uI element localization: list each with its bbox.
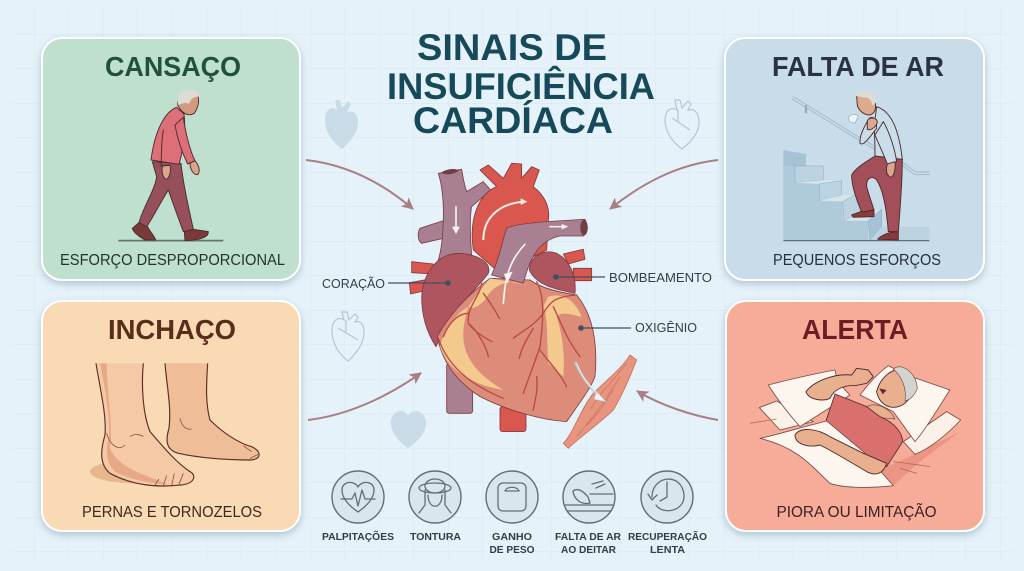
illustration: man in bed with pillows <box>750 366 961 487</box>
icon: ganho de peso: DE PESO <box>490 544 534 556</box>
arrow: alerta to heart <box>637 391 718 420</box>
icon: palpitações: PALPITAÇÕES <box>322 530 394 543</box>
left atrium <box>529 252 575 293</box>
illustration: man climbing stairs <box>783 90 930 241</box>
panel: falta de ar <box>725 38 984 280</box>
icon: faint heart mid left <box>332 312 364 361</box>
callout: coração <box>322 277 451 291</box>
icon: tontura <box>409 471 461 543</box>
arrow: falta de ar to heart <box>610 160 718 209</box>
title: SINAIS DE <box>417 27 607 68</box>
callout: oxigênio <box>578 320 697 335</box>
caption: pernas e tornozelos: PERNAS E TORNOZELOS <box>82 504 262 521</box>
coronary vessels <box>438 282 580 410</box>
icon: palpitações <box>322 471 394 543</box>
muscle <box>563 355 637 448</box>
icon: ganho de peso: GANHO <box>492 531 532 543</box>
ventricles <box>437 278 596 422</box>
icon: faint heart top right <box>665 100 699 149</box>
illustration: heart <box>409 163 637 448</box>
icon: falta de ar ao deitar: FALTA DE AR <box>555 531 621 543</box>
icon: faint heart lower <box>391 411 426 448</box>
pulmonary artery <box>492 219 587 283</box>
callout: bombeamento: BOMBEAMENTO <box>609 271 712 285</box>
arrow: inchaço to heart <box>308 373 421 420</box>
right vessels <box>563 249 592 281</box>
icon: falta de ar ao deitar: AO DEITAR <box>561 544 616 556</box>
vena cava inferior <box>447 363 473 413</box>
right atrium <box>422 253 489 347</box>
heading: inchaço: INCHAÇO <box>108 314 236 345</box>
title: CARDÍACA <box>413 100 613 141</box>
illustration: tired walking man <box>118 90 223 241</box>
icon: ganho de peso <box>486 471 538 556</box>
icon: faint heart top left <box>325 100 358 149</box>
caption: piora ou limitação: PIORA OU LIMITAÇÃO <box>776 501 936 521</box>
caption: esforço desproporcional: ESFORÇO DESPROPORCIONAL <box>60 252 285 269</box>
arrow: cansaço to heart <box>306 160 413 209</box>
icon: falta de ar ao deitar <box>555 471 621 556</box>
icon: recuperação lenta: LENTA <box>650 544 685 556</box>
illustration: swollen feet <box>90 363 259 486</box>
fat deposits <box>440 307 503 390</box>
flow arrows <box>456 207 565 303</box>
callout: oxigênio: OXIGÊNIO <box>635 320 697 335</box>
caption: pequenos esforços: PEQUENOS ESFORÇOS <box>773 252 941 269</box>
left vessels <box>418 221 443 243</box>
icon row: secondary symptoms <box>322 471 707 556</box>
heading: alerta: ALERTA <box>802 314 908 345</box>
callout: coração: CORAÇÃO <box>322 277 385 291</box>
icon: recuperação lenta <box>628 471 707 556</box>
icon: tontura: TONTURA <box>410 531 461 543</box>
descending aorta stub <box>500 407 526 432</box>
panel: alerta <box>726 301 984 531</box>
title <box>387 27 655 141</box>
panel: cansaço <box>42 38 300 280</box>
callout: bombeamento <box>553 271 712 285</box>
aortic arch <box>472 163 549 273</box>
heading: cansaço: CANSAÇO <box>105 51 241 82</box>
panel: inchaço <box>42 301 300 531</box>
superior vena cava <box>438 169 491 260</box>
title: INSUFICIÊNCIA <box>387 65 655 107</box>
heading: falta de ar: FALTA DE AR <box>772 51 944 82</box>
icon: recuperação lenta: RECUPERAÇÃO <box>628 530 707 543</box>
